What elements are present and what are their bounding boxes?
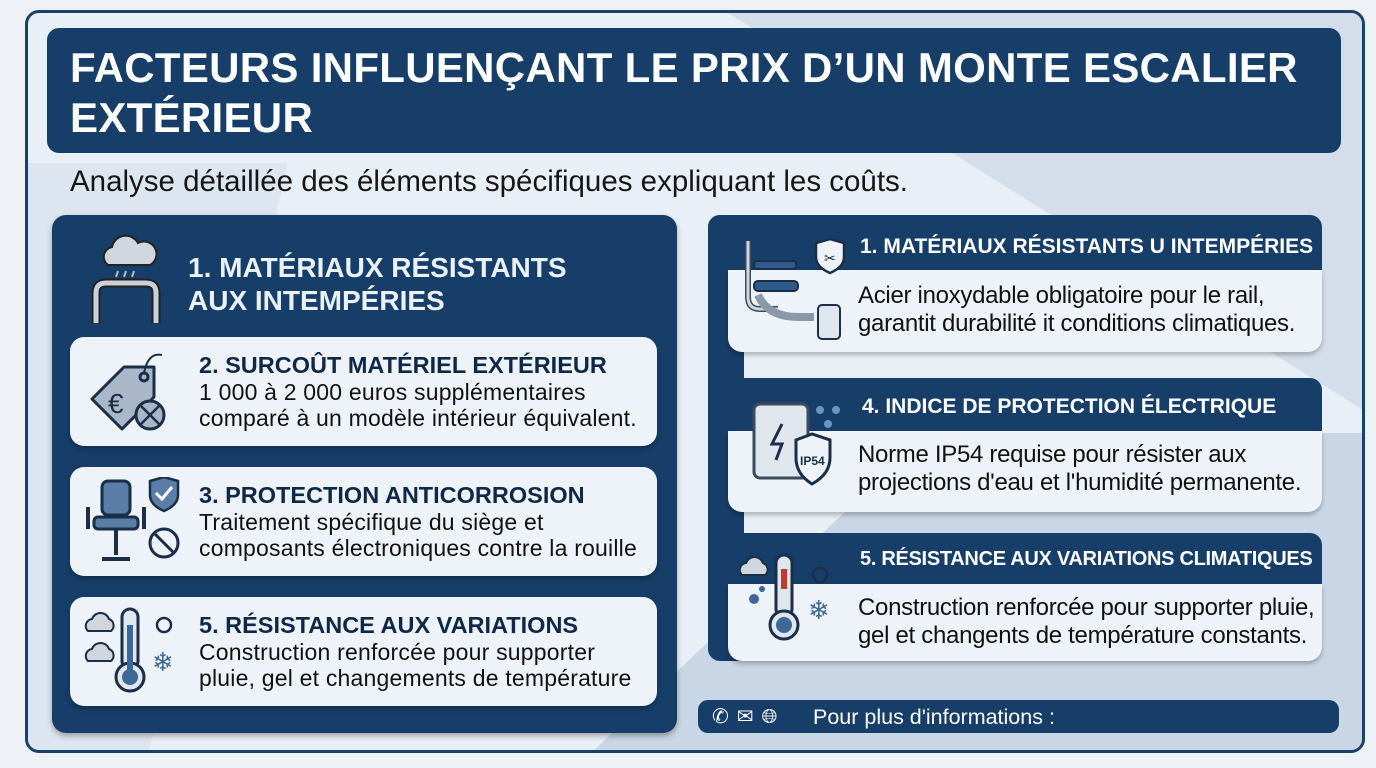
- card: anticorrosion: Traitement spécifique du siège et: [199, 509, 544, 535]
- icons: contact: ✆✉🌐︎: [712, 704, 786, 728]
- footer: contact bar: Pour plus d'informations :: [813, 705, 1055, 729]
- panel: right stripe: [708, 215, 744, 661]
- heading: left: [188, 252, 567, 316]
- heading: left: AUX INTEMPÉRIES: [188, 285, 445, 316]
- card: right 5: [727, 533, 1324, 666]
- card: anticorrosion: 3. PROTECTION ANTICORROSION: [199, 482, 585, 508]
- card: right 4: [727, 378, 1324, 518]
- icon: stairlift: [745, 238, 846, 340]
- icon: thermometer: ❄: [808, 596, 830, 626]
- icon: price tag: €: [108, 388, 124, 419]
- heading: right 5: 5. RÉSISTANCE AUX VARIATIONS CLIMATIQUES: [860, 548, 1312, 570]
- card: right 5: gel et changents de température constants.: [858, 622, 1307, 649]
- heading: right 4: 4. INDICE DE PROTECTION ÉLECTRIQUE: [862, 395, 1276, 418]
- icon: cloud and rail: [92, 234, 160, 323]
- card: variations: pluie, gel et changements de température: [199, 665, 632, 691]
- title bar: EXTÉRIEUR: [70, 94, 313, 141]
- card: right 5: Construction renforcée pour supporter pluie,: [858, 594, 1314, 621]
- icon: stairlift: ✂: [824, 250, 836, 266]
- card: variations: [70, 597, 657, 706]
- title bar: FACTEURS INFLUENÇANT LE PRIX D’UN MONTE ESCALIER: [70, 44, 1298, 91]
- footer: contact bar: [698, 700, 1339, 733]
- card: surcout: [70, 337, 657, 446]
- icon: thermometer: [740, 554, 830, 640]
- subtitle: Analyse détaillée des éléments spécifiques expliquant les coûts.: [70, 165, 908, 198]
- card: variations: 5. RÉSISTANCE AUX VARIATIONS: [199, 612, 578, 638]
- card: right 1: [708, 215, 1324, 358]
- card: right 1: garantit durabilité it conditions climatiques.: [858, 310, 1295, 337]
- card: right 4: Norme IP54 requise pour résister aux: [858, 441, 1246, 468]
- card: right 4: projections d'eau et l'humidité permanente.: [858, 469, 1301, 496]
- card: right 1: Acier inoxydable obligatoire pour le rail,: [858, 282, 1264, 309]
- card: surcout: 2. SURCOÛT MATÉRIEL EXTÉRIEUR: [199, 352, 607, 378]
- heading: left: 1. MATÉRIAUX RÉSISTANTS: [188, 252, 567, 283]
- icon: electric box IP54: [752, 402, 840, 486]
- icon: thermometer weather: ❄: [152, 648, 174, 678]
- icon: electric box IP54: IP54: [800, 454, 825, 468]
- card: surcout: comparé à un modèle intérieur équivalent.: [199, 405, 637, 431]
- card: surcout: 1 000 à 2 000 euros supplémentaires: [199, 379, 586, 405]
- title bar: [47, 28, 1341, 153]
- icon: seat and shield: [86, 477, 180, 561]
- card: variations: Construction renforcée pour supporter: [199, 639, 595, 665]
- icon: price tag: [90, 354, 166, 431]
- panel: left: [52, 215, 677, 733]
- heading: right 1: 1. MATÉRIAUX RÉSISTANTS U INTEMPÉRIES: [860, 235, 1313, 258]
- card: anticorrosion: composants électroniques contre la rouille: [199, 535, 637, 561]
- icon: thermometer weather: [84, 608, 174, 692]
- card: anticorrosion: [70, 467, 657, 576]
